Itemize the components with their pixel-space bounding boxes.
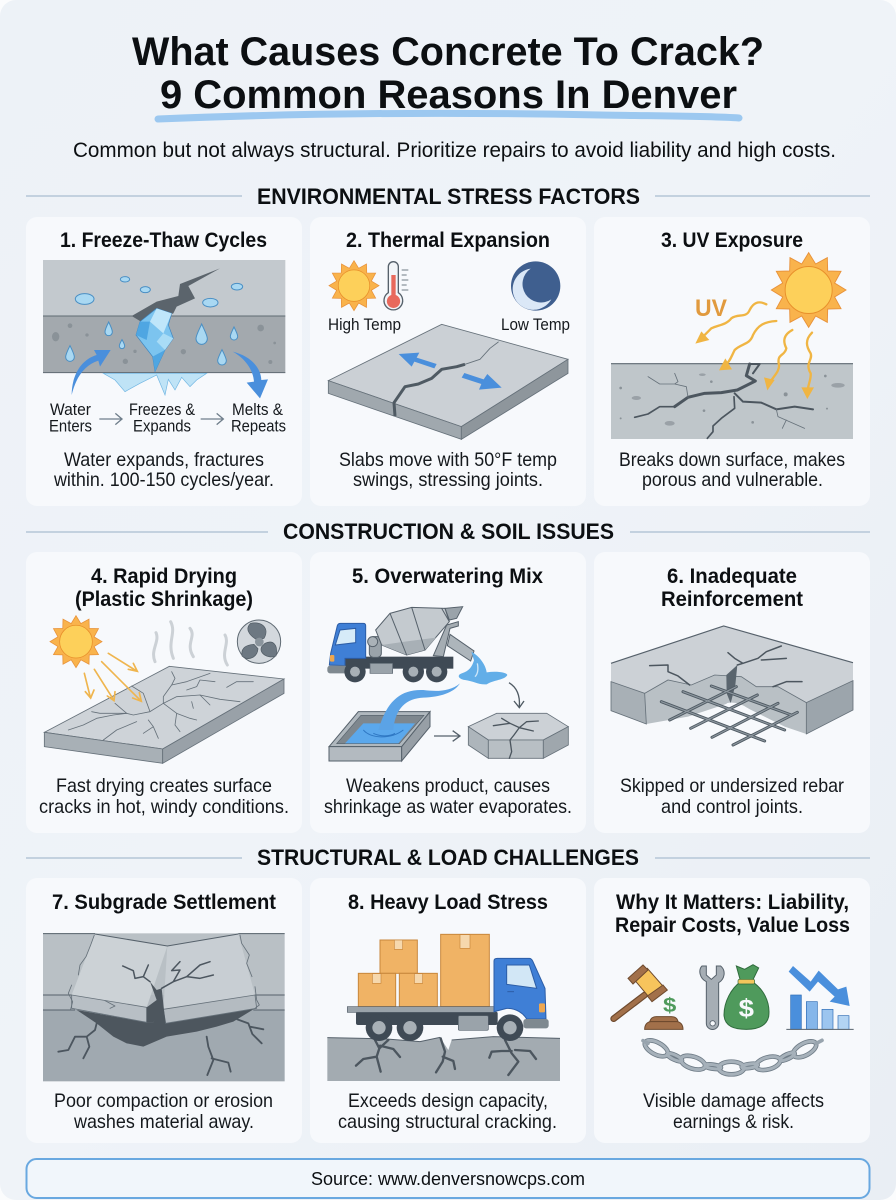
cycle step labels: Expands <box>133 418 191 436</box>
description: Weakens product, causes <box>346 775 550 797</box>
illustration: mixer truck, tray, cracked block <box>327 607 568 761</box>
description <box>339 449 557 491</box>
icon: gavel <box>614 965 683 1029</box>
panel: rapid drying <box>26 552 302 833</box>
title: What Causes Concrete To Crack? <box>132 30 764 74</box>
heading: heavy load: 8. Heavy Load Stress <box>348 891 548 914</box>
heading: reinforcement: Reinforcement <box>661 588 803 611</box>
section heading: structural: STRUCTURAL & LOAD CHALLENGES <box>257 845 639 870</box>
heading: rapid drying: (Plastic Shrinkage) <box>75 588 253 611</box>
panel: why it matters <box>594 878 870 1143</box>
icon: wrench and money bag: $ <box>739 996 754 1023</box>
description <box>643 1090 824 1133</box>
icon: chain <box>642 1037 822 1074</box>
heading: why it matters: Repair Costs, Value Loss <box>615 914 850 937</box>
panel: thermal expansion <box>310 217 586 506</box>
description: and control joints. <box>661 796 803 818</box>
description: porous and vulnerable. <box>642 469 823 491</box>
heading: freeze-thaw: 1. Freeze-Thaw Cycles <box>60 229 267 252</box>
temperature labels <box>328 316 570 334</box>
illustration: freeze-thaw slab <box>43 260 285 425</box>
cycle step labels: Freezes & <box>129 401 195 419</box>
description <box>338 1090 557 1133</box>
description: Poor compaction or erosion <box>54 1090 273 1112</box>
illustration: sunken slab with void <box>43 933 285 1081</box>
description: Slabs move with 50°F temp <box>339 449 557 471</box>
cycle step labels: Water <box>50 401 91 419</box>
source footer <box>26 1159 870 1198</box>
description <box>54 1090 273 1133</box>
description <box>39 775 289 818</box>
icon: falling value chart <box>786 966 854 1029</box>
title <box>132 30 764 119</box>
illustration: UV on cracked surface <box>611 253 853 439</box>
illustration: drying slab, sun and fan <box>44 616 284 763</box>
illustration: loaded truck on cracked ground <box>327 934 560 1081</box>
cycle step labels: Enters <box>49 418 92 436</box>
temperature labels: High Temp <box>328 316 401 334</box>
description: Visible damage affects <box>643 1090 824 1112</box>
icon: gavel: $ <box>663 994 677 1017</box>
description: swings, stressing joints. <box>353 469 543 491</box>
description: Exceeds design capacity, <box>348 1090 548 1112</box>
panel: UV exposure <box>594 217 870 506</box>
heading: reinforcement: 6. Inadequate <box>667 565 797 588</box>
section heading: environmental: ENVIRONMENTAL STRESS FACTORS <box>257 184 640 209</box>
source footer: Source: www.denversnowcps.com <box>311 1169 585 1189</box>
heading: subgrade: 7. Subgrade Settlement <box>52 891 276 914</box>
description: Water expands, fractures <box>64 449 264 471</box>
description: earnings & risk. <box>673 1111 794 1133</box>
description: shrinkage as water evaporates. <box>324 796 572 818</box>
illustration: exposed rebar in slab <box>611 626 853 745</box>
description: cracks in hot, windy conditions. <box>39 796 289 818</box>
section heading: construction: CONSTRUCTION & SOIL ISSUES <box>283 519 614 544</box>
description: Skipped or undersized rebar <box>620 775 844 797</box>
panel: inadequate reinforcement <box>594 552 870 833</box>
heading: why it matters <box>615 891 850 937</box>
heading: reinforcement <box>661 565 803 611</box>
temperature labels: Low Temp <box>501 316 570 334</box>
illustration: sun, thermometer, moon and slab <box>328 261 568 439</box>
description: causing structural cracking. <box>338 1111 557 1133</box>
UV label: UV <box>695 295 727 322</box>
cycle step labels: Repeats <box>231 418 286 436</box>
heading: thermal: 2. Thermal Expansion <box>346 229 550 252</box>
description: washes material away. <box>73 1111 254 1133</box>
heading: rapid drying <box>75 565 253 611</box>
heading: overwatering: 5. Overwatering Mix <box>352 565 543 588</box>
description: Breaks down surface, makes <box>619 449 845 471</box>
panel: overwatering mix <box>310 552 586 833</box>
description <box>324 775 572 818</box>
cycle step labels: Melts & <box>232 401 283 419</box>
heading: rapid drying: 4. Rapid Drying <box>91 565 237 588</box>
panel: heavy load stress <box>310 878 586 1143</box>
description <box>53 449 274 491</box>
description <box>619 449 845 491</box>
heading: UV: 3. UV Exposure <box>661 229 803 252</box>
cycle step labels <box>49 401 286 436</box>
description: within. 100-150 cycles/year. <box>53 469 274 491</box>
icon: wrench and money bag <box>700 965 769 1029</box>
subtitle: Common but not always structural. Prioritize repairs to avoid liability and high costs. <box>73 139 836 162</box>
description <box>620 775 844 818</box>
panel: freeze-thaw cycles <box>26 217 302 506</box>
title: 9 Common Reasons In Denver <box>160 73 737 117</box>
description: Fast drying creates surface <box>56 775 272 797</box>
panel: subgrade settlement <box>26 878 302 1143</box>
heading: why it matters: Why It Matters: Liability, <box>616 891 849 914</box>
